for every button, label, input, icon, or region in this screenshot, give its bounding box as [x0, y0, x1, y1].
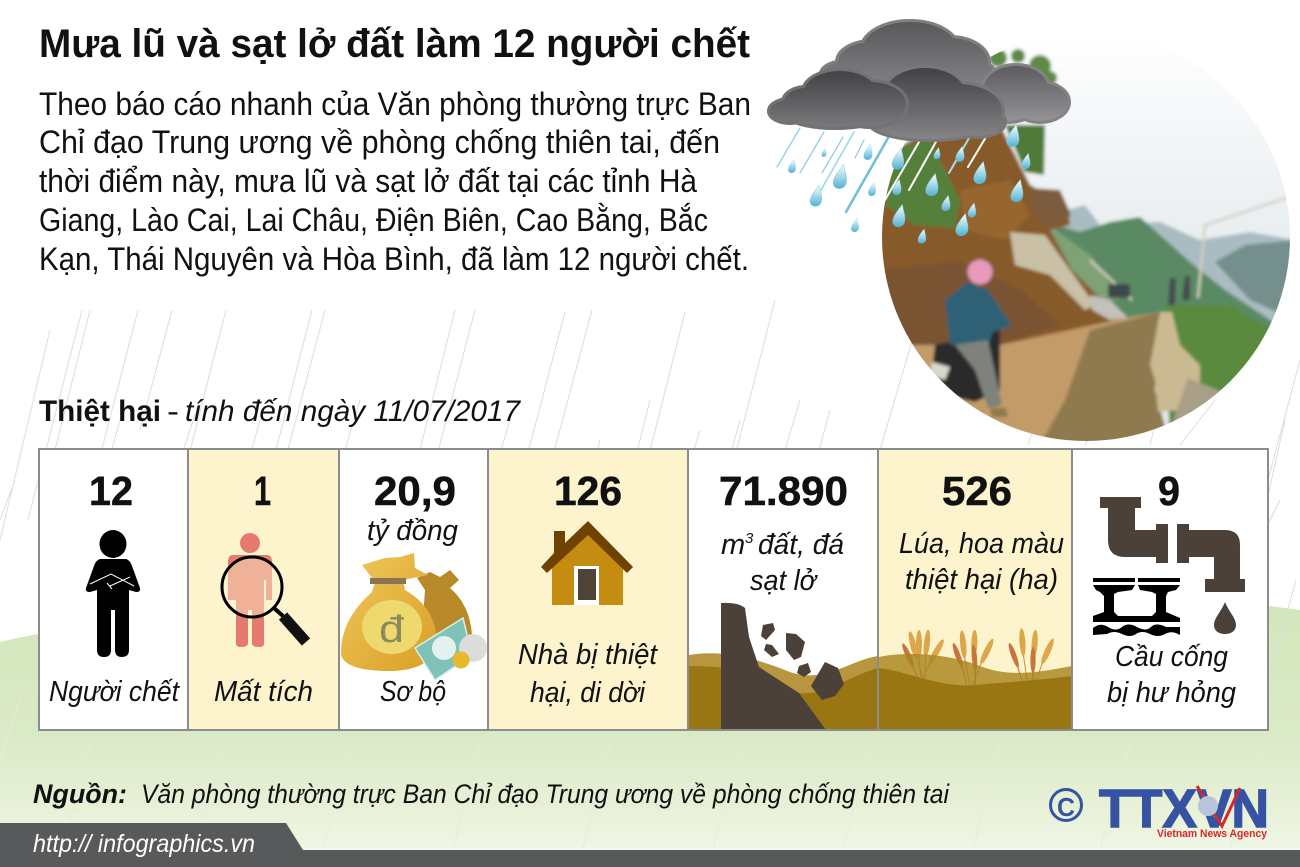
icon: wheat field [879, 628, 1072, 730]
icon: person under magnifier [222, 533, 306, 647]
cell: missing: 1 [254, 468, 271, 514]
icon: house [541, 521, 633, 605]
cell: deaths [49, 468, 181, 708]
cell: crops: thiệt hại (ha) [905, 564, 1058, 596]
cell: missing [214, 468, 313, 708]
motorbike [932, 330, 1000, 402]
rain streaks from cloud [777, 128, 986, 212]
cell: deaths: Người chết [49, 676, 181, 708]
title: Mưa lũ và sạt lở đất làm 12 người chết [39, 22, 750, 66]
right grass [1164, 304, 1268, 424]
intro text block: Giang, Lào Cai, Lai Châu, Điện Biên, Cao Bằng, Bắc [39, 202, 708, 238]
photo: landslide road [875, 30, 1295, 445]
icon: falling rocks on cliff [689, 603, 878, 730]
cell: money: 20,9 [374, 468, 456, 514]
cell: missing: Mất tích [214, 676, 313, 708]
intro text block: Theo báo cáo nhanh của Văn phòng thường trực Ban [39, 86, 751, 122]
cell: houses: Nhà bị thiệt [518, 639, 659, 671]
cell: bridges and culverts: Cầu cống [1115, 641, 1228, 673]
cell: bridges and culverts [1093, 468, 1245, 709]
cell: crops: Lúa, hoa màu [899, 528, 1064, 560]
rider [945, 282, 1012, 345]
cell: landslide volume: sạt lở [750, 565, 818, 597]
cell: landslide volume: đất, đá [758, 529, 844, 561]
road [905, 312, 1160, 445]
table frame [39, 449, 1268, 730]
cell: houses: hại, di dời [530, 677, 646, 709]
cell: bridges and culverts: 9 [1158, 468, 1180, 514]
footer bar [0, 823, 1300, 867]
cell: landslide volume: 3 [745, 530, 754, 547]
heading: damage date [39, 395, 521, 428]
intro text block: thời điểm này, mưa lũ và sạt lở đất tại các tỉnh Hà [39, 163, 697, 199]
icon: person [86, 530, 140, 657]
intro text block: Kạn, Thái Nguyên và Hòa Bình, đã làm 12 người chết. [39, 241, 749, 277]
rain streaks background [0, 280, 1300, 860]
cell: money: Sơ bộ [380, 676, 446, 708]
cell: crops [879, 468, 1072, 730]
source line: Nguồn: [33, 779, 127, 809]
cell: landslide volume: m [721, 529, 745, 561]
intro text block: Chỉ đạo Trung ương về phòng chống thiên tai, đến [39, 124, 720, 160]
intro text block [39, 86, 751, 277]
heading: damage date: tính đến ngày 11/07/2017 [185, 395, 521, 428]
utility pole [1090, 195, 1295, 300]
source line: Văn phòng thường trực Ban Chỉ đạo Trung ương về phòng chống thiên tai [141, 779, 950, 809]
heading: damage date: Thiệt hại [39, 395, 161, 428]
cell: money [341, 468, 487, 708]
cell: crops: 526 [942, 468, 1012, 514]
icon: storm clouds [770, 22, 1068, 139]
icon: money bags [341, 553, 487, 680]
people and car [1168, 276, 1190, 305]
website url: http:// infographics.vn [33, 830, 255, 858]
stone wall [1150, 312, 1200, 412]
landslide [882, 129, 1112, 346]
distant mountains [1060, 205, 1295, 330]
cell: houses: 126 [554, 468, 622, 514]
logo: TTXVN: C [1057, 792, 1075, 822]
heading: damage date: - [167, 395, 179, 428]
water drops [788, 124, 1030, 243]
cell: landslide volume: 71.890 [719, 468, 848, 514]
icon: broken pipes and bridge [1093, 497, 1245, 636]
cell: money: tỷ đồng [367, 515, 458, 547]
cell: landslide volume [689, 468, 878, 730]
panel: damage table [39, 449, 1268, 730]
trees on top [989, 49, 1057, 85]
cell: houses [518, 468, 659, 709]
logo: TTXVN: Vietnam News Agency [1157, 828, 1268, 840]
logo: TTXVN: TTXVN [1099, 779, 1269, 839]
cell: deaths: 12 [89, 468, 133, 514]
cell: bridges and culverts: bị hư hỏng [1107, 677, 1236, 709]
green hills [0, 606, 1300, 867]
icon: money bags: đ [379, 609, 405, 651]
